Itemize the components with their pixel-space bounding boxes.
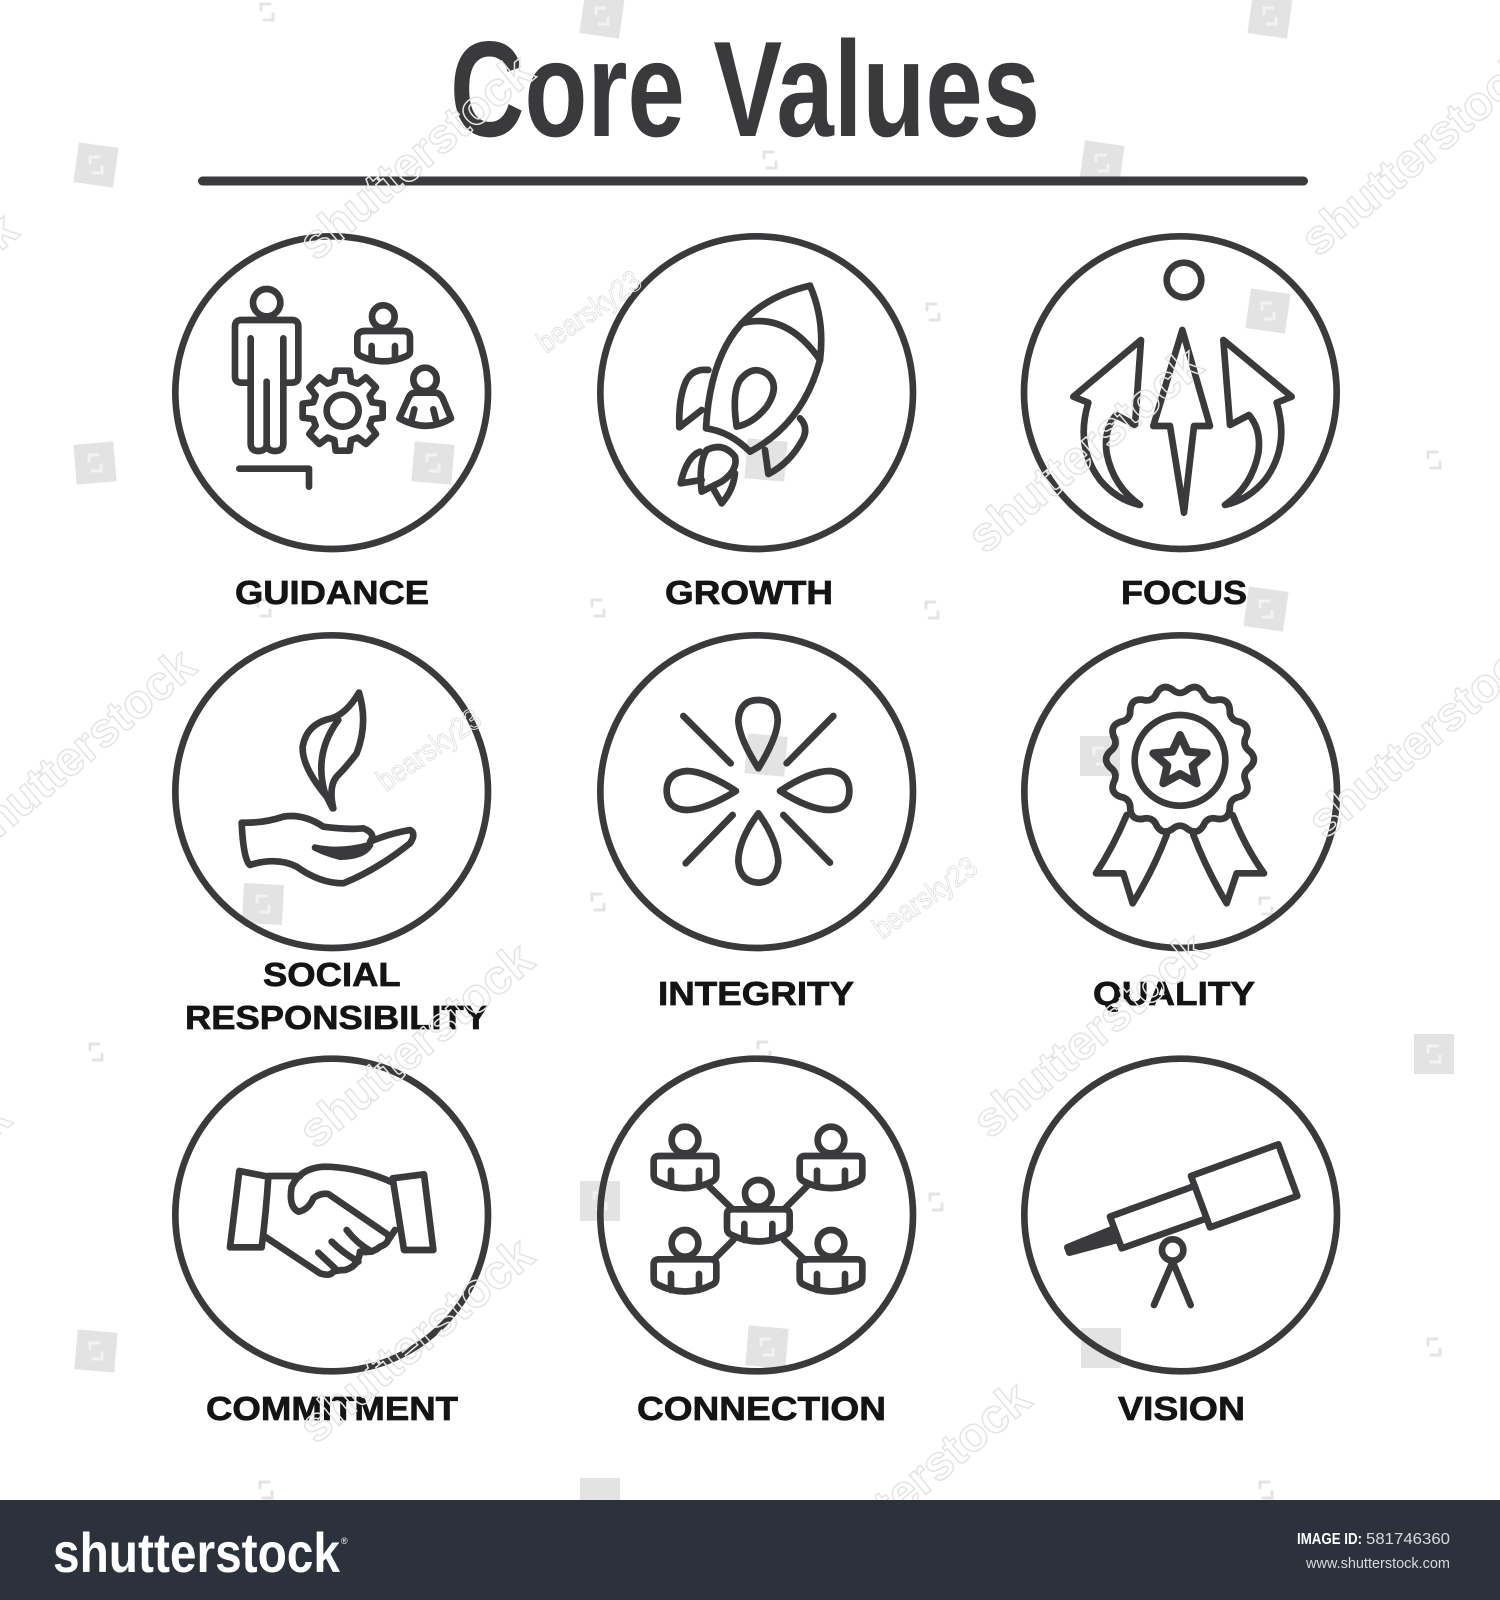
registered mark: ® bbox=[341, 1536, 348, 1546]
label: vision: VISION bbox=[1118, 1390, 1245, 1427]
watermark text: bearsky23 bbox=[371, 702, 487, 797]
watermark text: shutterstock bbox=[786, 1371, 1041, 1597]
label: social responsibility: RESPONSIBILITY bbox=[185, 999, 488, 1036]
footer logo: shutterstock bbox=[53, 1521, 341, 1584]
panel: focus bbox=[1024, 236, 1337, 611]
title rule bbox=[198, 176, 1308, 186]
icon: focus arrows bbox=[1024, 236, 1337, 549]
label: social responsibility: SOCIAL bbox=[263, 956, 400, 993]
label: connection: CONNECTION bbox=[637, 1390, 886, 1427]
panel: integrity bbox=[600, 635, 913, 1012]
watermark text: shutterstock bbox=[289, 44, 544, 270]
watermark text: shutterstock bbox=[958, 337, 1213, 563]
footer band bbox=[0, 1500, 1500, 1600]
watermark text: shutterstock bbox=[289, 932, 544, 1158]
watermark text: shutterstock bbox=[963, 922, 1218, 1148]
panel: connection bbox=[600, 1059, 913, 1427]
watermark text: bearsky23 bbox=[867, 850, 983, 945]
panel: growth bbox=[600, 236, 913, 611]
panel: vision bbox=[1024, 1059, 1337, 1427]
icon: guidance team and gear bbox=[175, 236, 488, 549]
image id label: IMAGE ID: bbox=[1297, 1531, 1362, 1548]
label: quality: QUALITY bbox=[1093, 975, 1255, 1012]
icon: rocket bbox=[600, 236, 913, 549]
label: commitment: COMMITMENT bbox=[206, 1390, 458, 1427]
panel: guidance bbox=[175, 236, 488, 611]
watermark text: bearsky23 bbox=[531, 264, 647, 359]
label: guidance: GUIDANCE bbox=[235, 574, 429, 611]
website: www.shutterstock.com bbox=[1305, 1555, 1450, 1572]
icon: petals and rays bbox=[600, 635, 913, 948]
icon: connected people network bbox=[600, 1059, 913, 1371]
icon: telescope bbox=[1024, 1059, 1337, 1371]
panel: quality bbox=[1024, 635, 1337, 1012]
title: Core Values bbox=[450, 13, 1040, 165]
panel: commitment bbox=[175, 1059, 488, 1427]
icon: award rosette bbox=[1024, 635, 1337, 948]
label: growth: GROWTH bbox=[665, 574, 833, 611]
icon: hand with leaf bbox=[175, 635, 488, 948]
panel: social responsibility bbox=[175, 635, 488, 1036]
watermark text: shutterstock bbox=[289, 1227, 544, 1453]
label: focus: FOCUS bbox=[1121, 574, 1247, 611]
watermark square glyphs bbox=[89, 8, 1440, 1359]
label: integrity: INTEGRITY bbox=[658, 975, 854, 1012]
image id number: 581746360 bbox=[1366, 1531, 1450, 1548]
icon: handshake bbox=[175, 1059, 488, 1371]
